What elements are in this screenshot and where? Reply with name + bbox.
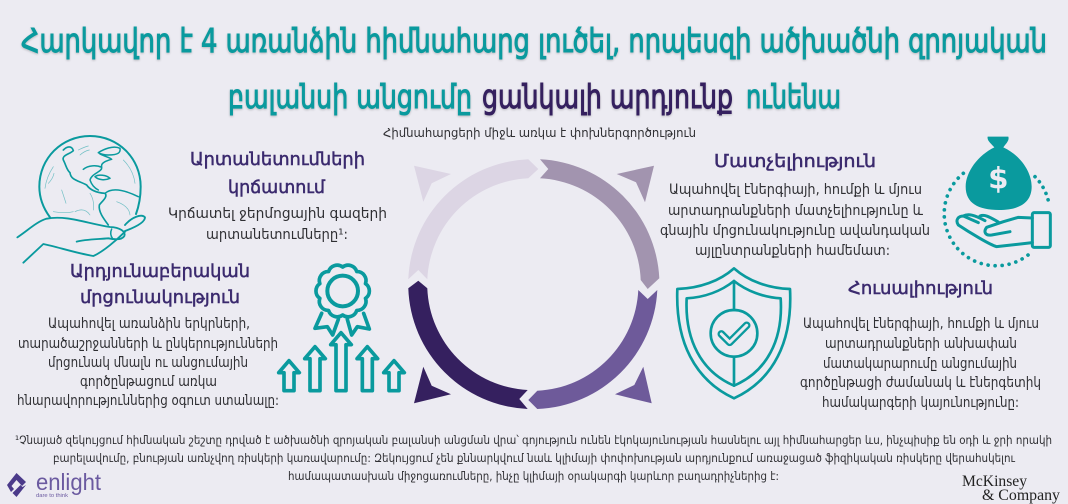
title: ցանկալի արդյունք <box>482 77 733 116</box>
text block: affordability <box>660 182 930 259</box>
icon: award rosette with rising arrows <box>279 265 404 391</box>
title: ունենա <box>746 77 841 116</box>
text block: industrial competitiveness: տարածաշրջանների և ընկերությունների <box>18 336 278 352</box>
heading: reliability: Հուսալիություն <box>848 278 993 299</box>
heading: emissions reduction: կրճատում <box>228 177 326 198</box>
logo: enlight: enlight <box>36 469 102 495</box>
text block: affordability: այլընտրանքների համեմատ: <box>695 243 890 259</box>
icon: money bag over hand: $ <box>988 161 1009 195</box>
text block: emissions reduction <box>168 206 387 243</box>
logo: enlight: dare to think <box>36 493 69 499</box>
ring segment: top left <box>408 159 538 279</box>
title: բալանսի անցումը <box>228 77 472 116</box>
text block: industrial competitiveness: Ապահովել առանձին երկրների, <box>48 316 250 332</box>
text block: emissions reduction: Կրճատել ջերմոցային գազերի <box>168 206 387 222</box>
arrowhead: bottom right <box>615 367 652 403</box>
ring segment: bottom left <box>408 281 528 409</box>
heading: industrial competitiveness <box>70 261 250 308</box>
text block: affordability: գնային մրցունակությունը ավանդական <box>660 223 930 239</box>
ring segment: bottom right <box>528 290 657 409</box>
footnote <box>15 433 1052 483</box>
text block: industrial competitiveness <box>17 316 279 409</box>
text block: affordability: արտադրանքների մատչելիությունը և <box>668 203 924 219</box>
text block: industrial competitiveness: հնարավորություններից օգուտ ստանալը: <box>17 393 279 409</box>
icon: shield with check <box>677 268 790 398</box>
text block: reliability: համակարգերի կայունությունը: <box>822 395 1019 411</box>
text block: reliability: արտադրանքների անխափան <box>825 336 1017 352</box>
logo: McKinsey & Company <box>962 473 1060 504</box>
heading: affordability: Մատչելիություն <box>714 151 876 172</box>
panel: emissions reduction <box>168 149 387 243</box>
text block: industrial competitiveness: մրցունակ մնալն ու անցումային <box>48 355 248 371</box>
text block: reliability: մատակարարումը անցումային <box>823 356 1017 372</box>
arrowhead: top left <box>414 166 451 202</box>
subtitle: interaction between issues: Հիմնահարցերի միջև առկա է փոխներգործություն <box>383 125 696 140</box>
title <box>21 21 1047 116</box>
text block: affordability: Ապահովել էներգիայի, հումքի և մյուս <box>669 182 922 198</box>
heading: emissions reduction: Արտանետումների <box>190 149 365 170</box>
heading: industrial competitiveness: Արդյունաբերական <box>70 261 250 282</box>
logo: McKinsey & Company: & Company <box>982 487 1060 504</box>
icon: globe in hand <box>17 136 145 263</box>
footnote: համապատասխան միջոցառումները, ինչը կլիմայի օրակարգի կարևոր բաղադրիչներից է: <box>288 469 779 483</box>
arrowhead: bottom left <box>414 367 451 403</box>
panel: reliability <box>800 278 1041 411</box>
heading: industrial competitiveness: մրցունակություն <box>80 287 240 308</box>
logo: enlight <box>7 469 102 499</box>
panel: affordability <box>660 151 930 259</box>
text block: industrial competitiveness: գործընթացում առկա <box>80 374 217 390</box>
cycle diagram <box>408 159 659 409</box>
icon: money bag over hand <box>944 137 1050 266</box>
text block: reliability <box>800 316 1041 411</box>
text block: emissions reduction: արտանետումները¹: <box>206 227 348 243</box>
ring segment: top right <box>540 159 659 289</box>
arrowhead: top right <box>617 166 654 202</box>
logo: McKinsey & Company: McKinsey <box>962 473 1027 490</box>
panel: industrial competitiveness <box>17 261 279 409</box>
heading: emissions reduction <box>190 149 365 198</box>
